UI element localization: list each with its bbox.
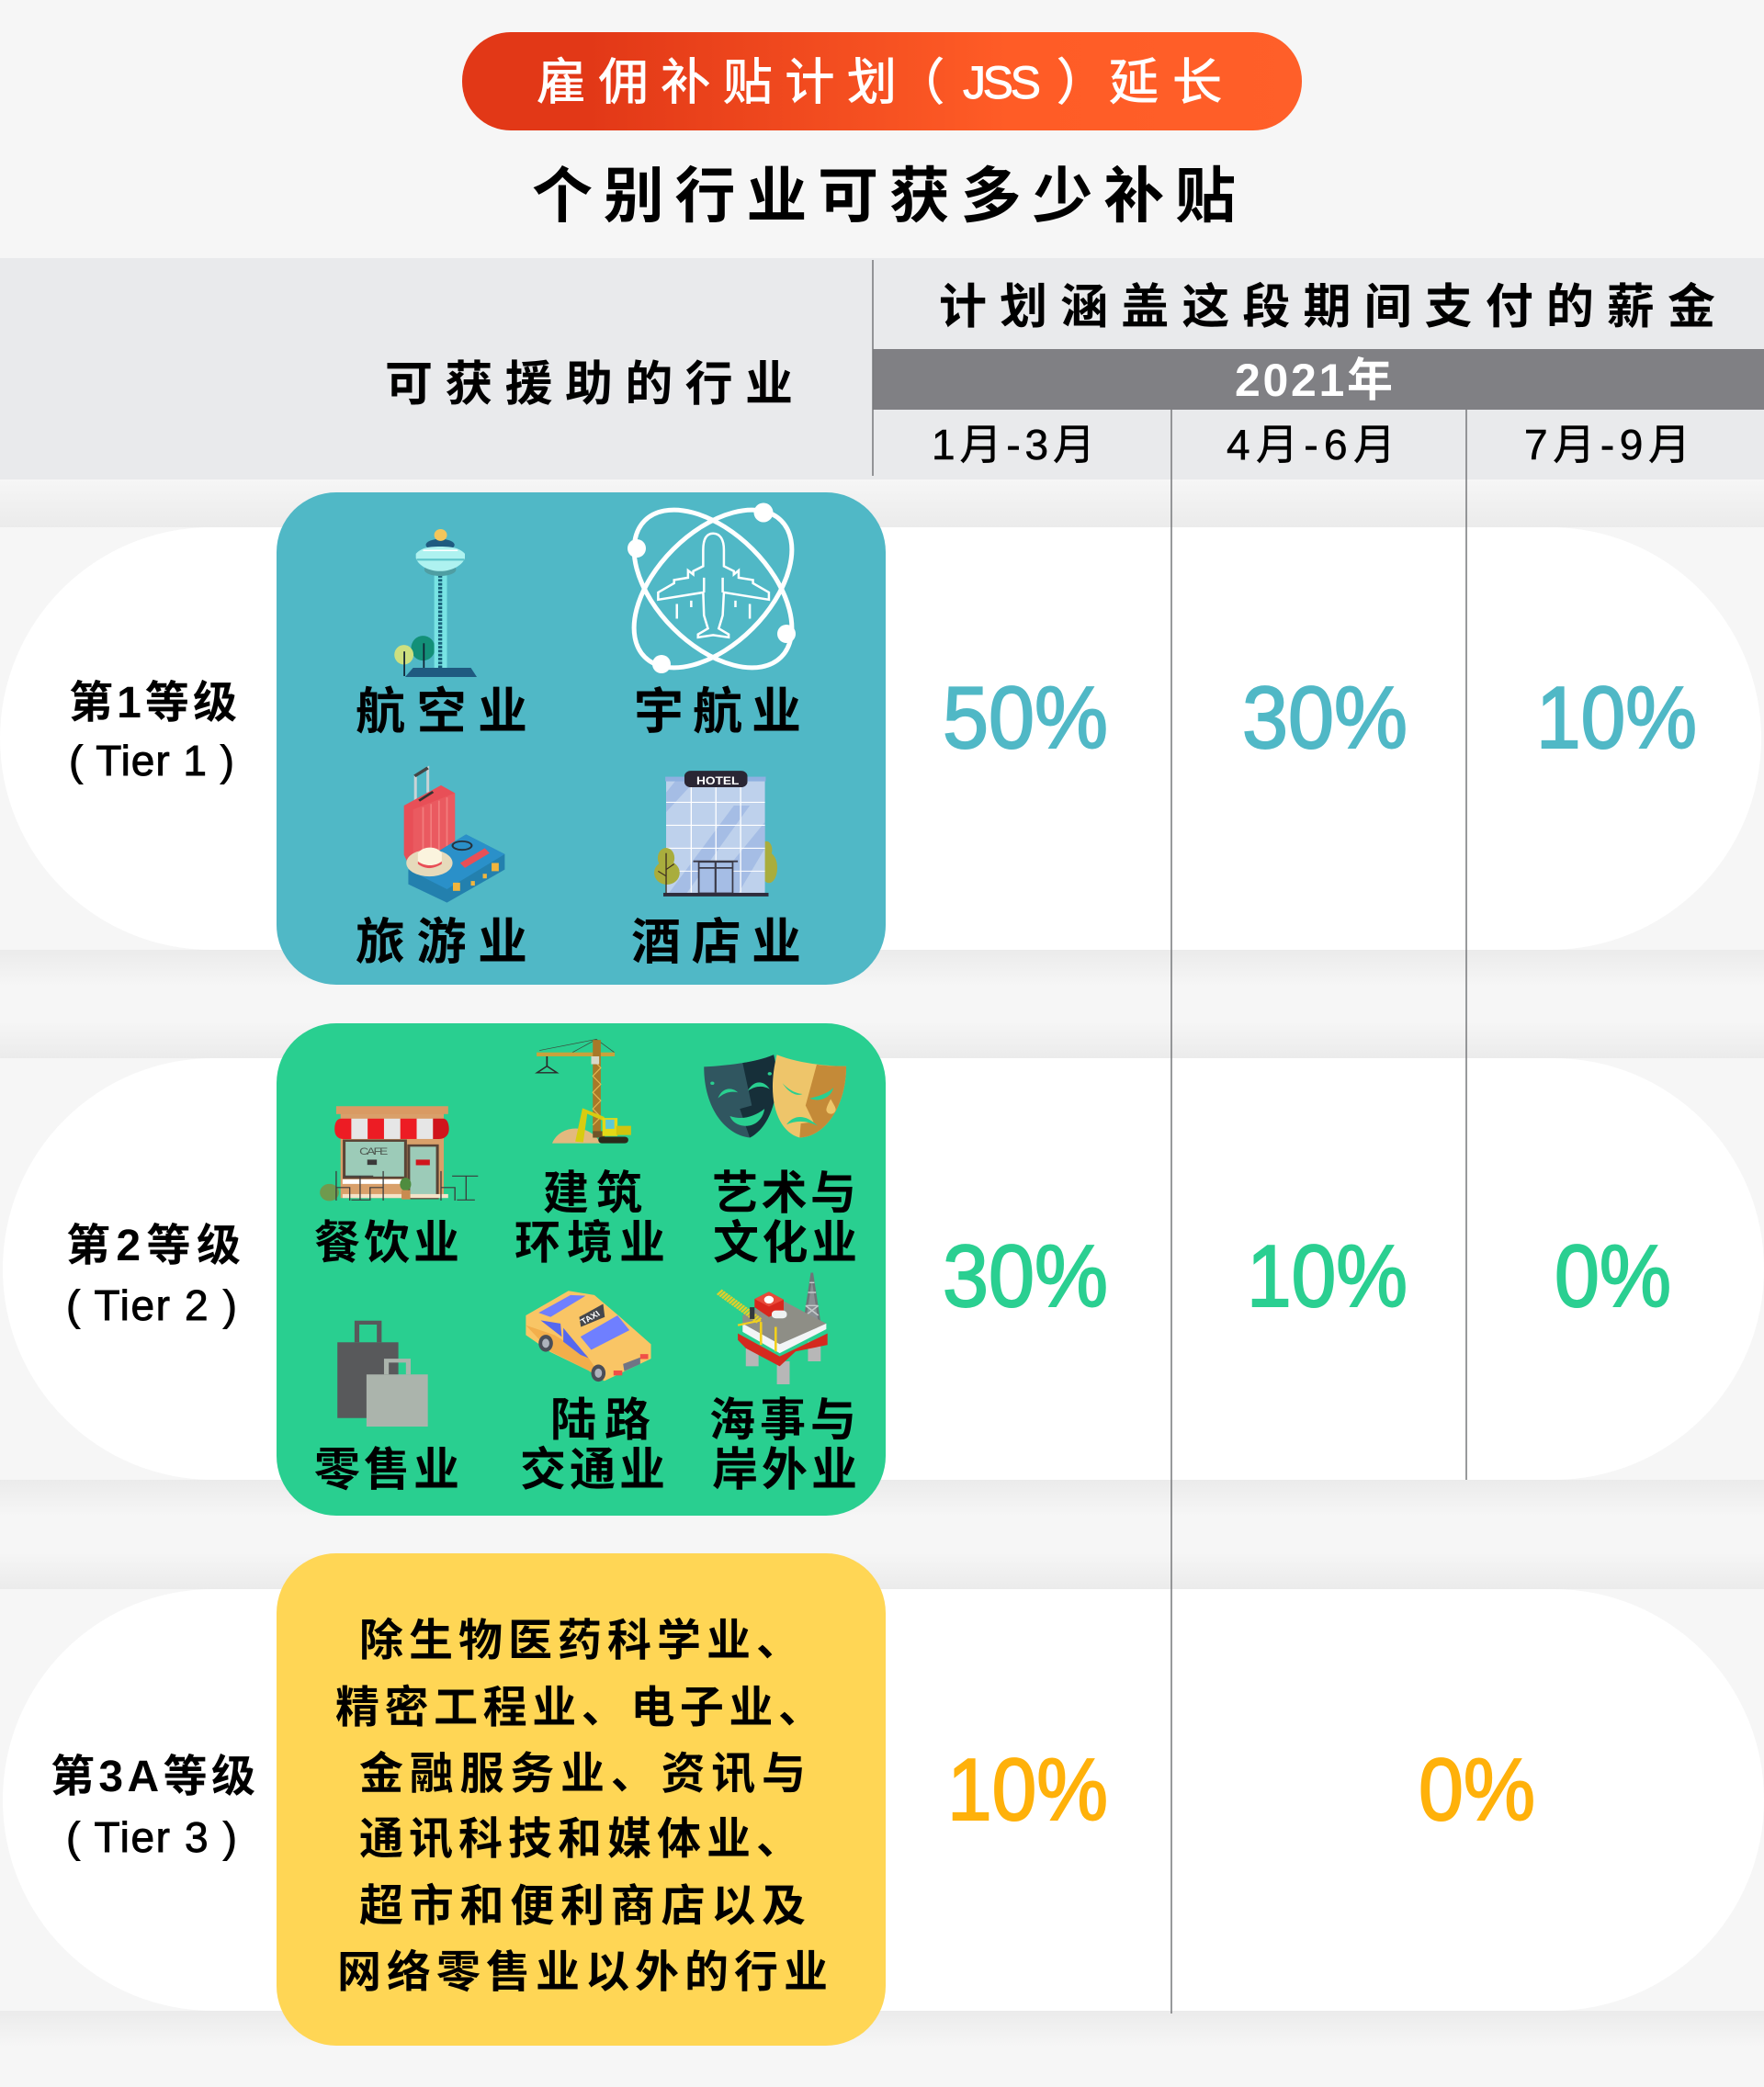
label: food services: 餐饮业 [314,1217,459,1269]
tier 1 label: ( Tier 1 ) [69,737,234,784]
label: aerospace: 宇航业 [634,684,801,739]
header: eligible sectors: 可获援助的行业 [385,358,793,412]
title pill [462,32,1302,130]
icon: luggage [404,768,504,903]
text: tier 3 sector list: 除生物医药科学业、 [359,1617,800,1665]
header: months 4-6: 4月-6月 [1227,421,1396,468]
tier 3 percentages: 10% [947,1741,1108,1839]
icon: cafe: CAFE [359,1145,388,1157]
label: land transport [520,1394,665,1495]
icon: taxi: TAXI [579,1310,603,1326]
tier 3 label: ( Tier 3 ) [66,1813,237,1861]
tier 2 label: 第2等级 [66,1222,241,1270]
label: marine and offshore [709,1394,857,1495]
header: year: 2021年 [1235,355,1393,406]
text: tier 3 sector list: 网络零售业以外的行业 [337,1948,828,1997]
row 3 background [3,1589,1764,2011]
label: retail: 零售业 [314,1444,459,1495]
label: arts and culture: 文化业 [713,1217,857,1269]
header: months 1-3: 1月-3月 [932,421,1095,468]
row 1 background [0,527,1761,950]
label: marine and offshore: 岸外业 [712,1444,857,1495]
title pill: ） [1057,55,1106,110]
tier 2 label [66,1222,241,1329]
tier 1 percentages: 30% [1242,669,1408,767]
tier 1 label: 第1等级 [69,679,237,728]
text: tier 3 sector list: 金融服务业、资讯与 [359,1750,806,1799]
label: hotels: 酒店业 [631,915,801,970]
text: tier 3 sector list: 超市和便利商店以及 [359,1882,806,1931]
icon: hotel: HOTEL [696,774,739,786]
icon: oil rig [719,1273,828,1384]
label: aviation: 航空业 [356,684,527,739]
label: construction: 建筑 [543,1168,642,1219]
text: tier 3 sector list: 精密工程业、电子业、 [335,1684,822,1732]
icon: cafe [320,1106,478,1201]
label: land transport: 交通业 [520,1444,665,1495]
text: tier 3 sector list: 通讯科技和媒体业、 [359,1815,800,1864]
label: construction [514,1168,665,1269]
header: period covered: 计划涵盖这段期间支付的薪金 [939,281,1715,334]
tier 3 label: 第3A等级 [51,1753,255,1801]
title pill: （ [895,55,944,110]
tier 2 label: ( Tier 2 ) [66,1281,237,1329]
row 2 background [3,1058,1764,1480]
label: arts and culture [712,1168,857,1269]
tier 1 percentages: 10% [1536,669,1697,767]
tier 3 percentages: 0% [1419,1741,1535,1839]
tier 2 percentages: 10% [1247,1227,1408,1326]
tier 2 percentages: 30% [943,1227,1108,1326]
text: tier 3 sector list [335,1617,828,1997]
icon: theatre masks [704,1055,846,1138]
header: months 7-9: 7月-9月 [1524,421,1690,468]
icon: shopping bags [337,1323,428,1427]
panel: tier 1 sectors [277,481,886,985]
label: tourism: 旅游业 [356,915,527,970]
table header [0,258,1764,479]
tier 1 percentages [943,669,1697,767]
tier 1 label [69,679,237,784]
tier 2 percentages [943,1227,1671,1326]
label: marine and offshore: 海事与 [709,1394,856,1446]
icon: crane and excavator [537,1039,631,1144]
tier 3 percentages [947,1741,1535,1839]
panel: tier 2 sectors [277,1023,886,1516]
title pill: 雇佣补贴计划 [537,55,897,110]
tier 1 percentages: 50% [943,669,1108,767]
title pill: JSS [963,57,1041,108]
label: arts and culture: 艺术与 [712,1168,856,1219]
subtitle: 个别行业可获多少补贴 [532,162,1236,230]
icon: taxi [526,1291,651,1382]
panel: tier 3 sectors [277,1553,886,2046]
icon: hotel [654,771,777,897]
label: land transport: 陆路 [550,1394,650,1446]
title pill: 延长 [1109,55,1222,110]
icon: plane with orbits [605,481,820,696]
tier 2 percentages: 0% [1555,1227,1671,1326]
icon: changi control tower [394,529,477,677]
label: construction: 环境业 [514,1217,665,1269]
tier 3 label [51,1753,255,1861]
